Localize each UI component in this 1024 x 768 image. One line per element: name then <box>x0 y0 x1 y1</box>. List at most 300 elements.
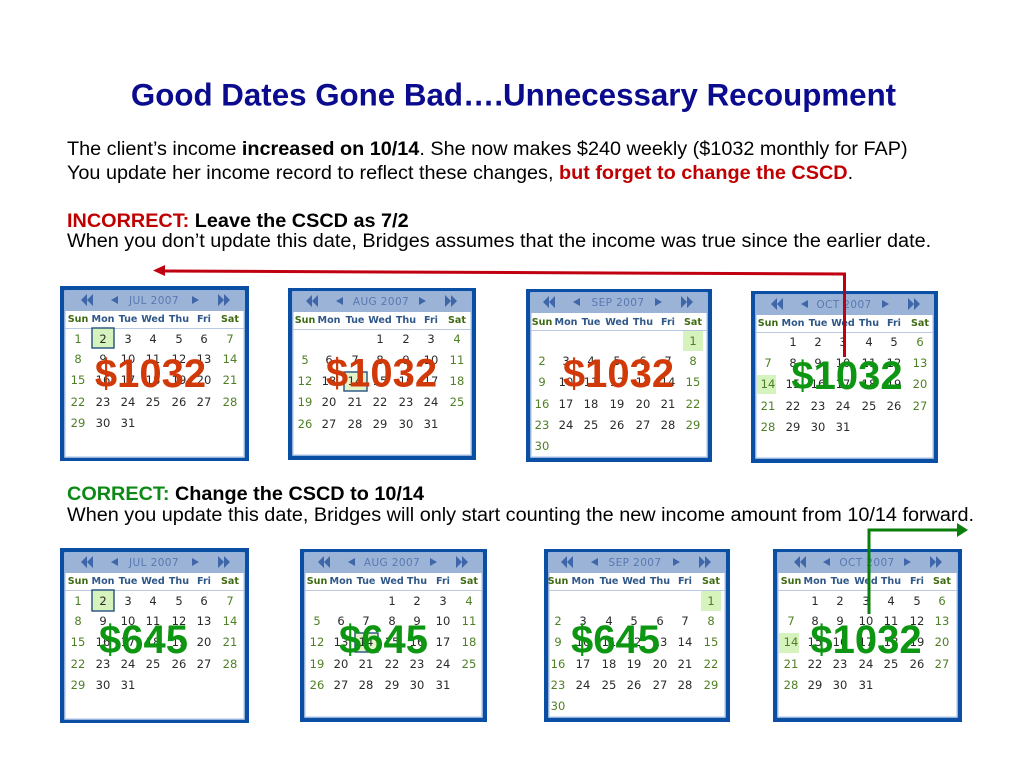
calendar: August 2007 correct: 6 <box>337 614 345 628</box>
calendar: October 2007 incorrect: 12 <box>887 356 901 370</box>
calendar: July 2007 incorrect: Sun <box>68 314 88 325</box>
calendar: September 2007 incorrect: 9 <box>538 375 546 389</box>
calendar: July 2007 incorrect <box>60 286 249 461</box>
calendar: October 2007 correct: 22 <box>808 657 822 671</box>
calendar: September 2007 incorrect: $1032 <box>563 352 674 396</box>
calendar: July 2007 correct: 29 <box>71 678 85 692</box>
calendar: August 2007 incorrect: 30 <box>399 417 413 431</box>
calendar: September 2007 incorrect: 21 <box>661 397 675 411</box>
calendar: September 2007 incorrect: 16 <box>535 397 549 411</box>
calendar: July 2007 incorrect: 20 <box>197 373 211 387</box>
calendar: July 2007 correct: 19 <box>172 635 186 649</box>
calendar: October 2007 correct: Tue <box>831 576 850 587</box>
calendar: July 2007 correct: 17 <box>121 635 135 649</box>
calendar: July 2007 correct: 22 <box>71 657 85 671</box>
calendar: October 2007 correct: 16 <box>833 635 847 649</box>
calendar: July 2007 incorrect: 5 <box>175 332 183 346</box>
calendar: July 2007 correct: 4 <box>149 594 157 608</box>
calendar: August 2007 correct: 30 <box>410 678 424 692</box>
calendar: August 2007 correct: 21 <box>359 657 373 671</box>
calendar: August 2007 incorrect: 18 <box>450 374 464 388</box>
calendar: September 2007 incorrect: 17 <box>559 397 573 411</box>
calendar: September 2007 correct: 29 <box>704 678 718 692</box>
calendar: October 2007 incorrect: 31 <box>836 420 850 434</box>
calendar: September 2007 incorrect: 2 <box>538 354 546 368</box>
calendar: September 2007 incorrect: SEP 2007 <box>592 297 644 309</box>
calendar: September 2007 incorrect: 25 <box>584 418 598 432</box>
calendar: October 2007 incorrect: 16 <box>811 377 825 391</box>
calendar: October 2007 correct: 7 <box>787 614 795 628</box>
calendar: October 2007 incorrect: 1 <box>789 335 797 349</box>
calendar: July 2007 correct: 14 <box>223 614 237 628</box>
calendar: September 2007 correct: 2 <box>554 614 562 628</box>
calendar: October 2007 correct: 8 <box>811 614 819 628</box>
calendar: August 2007 incorrect: 27 <box>322 417 336 431</box>
calendar: August 2007 correct: Thu <box>407 576 427 587</box>
calendar: October 2007 correct: 30 <box>833 678 847 692</box>
calendar: October 2007 correct: 13 <box>935 614 949 628</box>
calendar: August 2007 correct: Fri <box>436 576 450 587</box>
calendar: October 2007 correct: 14 <box>784 635 798 649</box>
calendar: September 2007 incorrect: Mon <box>555 317 578 328</box>
calendar: September 2007 incorrect: 12 <box>610 375 624 389</box>
calendar: August 2007 correct: 14 <box>359 635 373 649</box>
calendar: September 2007 incorrect: 1 <box>689 334 697 348</box>
calendar: July 2007 correct: 16 <box>96 635 110 649</box>
calendar: October 2007 incorrect: 27 <box>913 399 927 413</box>
calendar: August 2007 incorrect: 25 <box>450 395 464 409</box>
calendar: July 2007 incorrect: 30 <box>96 416 110 430</box>
calendar: July 2007 correct: 28 <box>223 657 237 671</box>
calendar: September 2007 incorrect: 3 <box>562 354 570 368</box>
calendar: September 2007 correct: 4 <box>605 614 613 628</box>
calendar: October 2007 incorrect: 15 <box>786 377 800 391</box>
calendar: October 2007 correct: 12 <box>910 614 924 628</box>
calendar: October 2007 correct: 27 <box>935 657 949 671</box>
calendar: September 2007 correct: 5 <box>630 614 638 628</box>
calendar: October 2007 incorrect: 8 <box>789 356 797 370</box>
calendar: July 2007 correct: Wed <box>141 576 165 587</box>
calendar: August 2007 incorrect: 23 <box>399 395 413 409</box>
calendar: September 2007 correct: Wed <box>622 576 646 587</box>
text block: correct: CORRECT: Change the CSCD to 10/14 <box>67 483 424 505</box>
calendar: August 2007 incorrect: Tue <box>346 315 365 326</box>
calendar: July 2007 incorrect: 1 <box>74 332 82 346</box>
calendar: August 2007 correct: Mon <box>330 576 353 587</box>
calendar: July 2007 incorrect: 8 <box>74 352 82 366</box>
calendar: October 2007 correct: 19 <box>910 635 924 649</box>
calendar: July 2007 correct: Fri <box>197 576 211 587</box>
calendar: September 2007 correct: Thu <box>650 576 670 587</box>
calendar: July 2007 correct: 26 <box>172 657 186 671</box>
calendar: July 2007 correct: Mon <box>92 576 115 587</box>
calendar: October 2007 correct: 24 <box>859 657 873 671</box>
calendar: September 2007 correct: 14 <box>678 635 692 649</box>
calendar: July 2007 correct: 9 <box>99 614 107 628</box>
calendar: August 2007 incorrect: 12 <box>298 374 312 388</box>
calendar: September 2007 incorrect: 13 <box>636 375 650 389</box>
calendar: September 2007 incorrect: 20 <box>636 397 650 411</box>
calendar: August 2007 incorrect: 2 <box>402 332 410 346</box>
calendar: July 2007 incorrect: Tue <box>119 314 138 325</box>
calendar: August 2007 incorrect: Fri <box>424 315 438 326</box>
calendar: October 2007 correct: 15 <box>808 635 822 649</box>
calendar: September 2007 incorrect: 24 <box>559 418 573 432</box>
calendar: September 2007 incorrect: 30 <box>535 439 549 453</box>
calendar: October 2007 incorrect: 7 <box>764 356 772 370</box>
calendar: October 2007 correct: 5 <box>913 594 921 608</box>
calendar: August 2007 incorrect: 31 <box>424 417 438 431</box>
calendar: September 2007 incorrect: Sun <box>532 317 552 328</box>
calendar: July 2007 incorrect: $1032 <box>95 352 206 396</box>
calendar: September 2007 incorrect: 8 <box>689 354 697 368</box>
calendar: September 2007 incorrect: 28 <box>661 418 675 432</box>
calendar: October 2007 incorrect: 18 <box>862 377 876 391</box>
calendar: August 2007 incorrect: 11 <box>450 353 464 367</box>
calendar: July 2007 correct: 15 <box>71 635 85 649</box>
calendar: August 2007 correct: 28 <box>359 678 373 692</box>
calendar: September 2007 correct: SEP 2007 <box>609 557 661 569</box>
calendar: October 2007 correct: 2 <box>836 594 844 608</box>
calendar: July 2007 correct: Sun <box>68 576 88 587</box>
calendar: October 2007 correct: Sat <box>933 576 951 587</box>
calendar: September 2007 correct: 21 <box>678 657 692 671</box>
calendar: September 2007 correct: 16 <box>551 657 565 671</box>
calendar: August 2007 incorrect: 24 <box>424 395 438 409</box>
calendar: August 2007 correct: 16 <box>410 635 424 649</box>
calendar: August 2007 incorrect: Mon <box>318 315 341 326</box>
calendar: October 2007 incorrect: 19 <box>887 377 901 391</box>
calendar: August 2007 incorrect: Wed <box>368 315 392 326</box>
calendar: July 2007 correct: 20 <box>197 635 211 649</box>
calendar: July 2007 incorrect: 9 <box>99 352 107 366</box>
calendar: September 2007 correct: 23 <box>551 678 565 692</box>
calendar: August 2007 correct: 24 <box>436 657 450 671</box>
calendar: July 2007 incorrect: 3 <box>124 332 132 346</box>
calendar: August 2007 incorrect: 7 <box>351 353 359 367</box>
calendar: July 2007 correct: 25 <box>146 657 160 671</box>
calendar: September 2007 correct: 22 <box>704 657 718 671</box>
text block: incorrect: INCORRECT: Leave the CSCD as 7/2 <box>67 210 409 232</box>
calendar: July 2007 incorrect: 22 <box>71 395 85 409</box>
calendar: October 2007 incorrect: 17 <box>836 377 850 391</box>
calendar: September 2007 incorrect: Sat <box>684 317 702 328</box>
calendar: September 2007 correct: 20 <box>653 657 667 671</box>
calendar: October 2007 correct: Mon <box>804 576 827 587</box>
calendar: July 2007 incorrect: 7 <box>226 332 234 346</box>
calendar: August 2007 incorrect: 15 <box>373 374 387 388</box>
calendar: October 2007 correct: 21 <box>784 657 798 671</box>
calendar: July 2007 correct: 12 <box>172 614 186 628</box>
calendar: August 2007 correct: 11 <box>462 614 476 628</box>
calendar: September 2007 correct: 7 <box>681 614 689 628</box>
calendar: July 2007 correct <box>60 548 249 723</box>
calendar: July 2007 incorrect: Thu <box>169 314 189 325</box>
calendar: October 2007 incorrect: 22 <box>786 399 800 413</box>
calendar: July 2007 incorrect: 15 <box>71 373 85 387</box>
calendar: September 2007 correct: 24 <box>576 678 590 692</box>
calendar: September 2007 correct: 6 <box>656 614 664 628</box>
calendar: October 2007 incorrect: Tue <box>809 318 828 329</box>
calendar: October 2007 incorrect: 5 <box>890 335 898 349</box>
calendar: October 2007 incorrect: $1032 <box>791 354 903 398</box>
calendar: July 2007 incorrect: 21 <box>223 373 237 387</box>
calendar: October 2007 incorrect: OCT 2007 <box>816 299 872 311</box>
calendar: August 2007 correct: 4 <box>465 594 473 608</box>
calendar: October 2007 incorrect: 10 <box>836 356 850 370</box>
calendar: October 2007 correct: OCT 2007 <box>839 557 895 569</box>
calendar: October 2007 incorrect: Fri <box>887 318 901 329</box>
calendar: September 2007 incorrect: 15 <box>686 375 700 389</box>
calendar: September 2007 correct: 27 <box>653 678 667 692</box>
calendar: July 2007 correct: 24 <box>121 657 135 671</box>
calendar: September 2007 incorrect: 29 <box>686 418 700 432</box>
calendar: August 2007 incorrect: Thu <box>396 315 416 326</box>
calendar: August 2007 incorrect: 8 <box>376 353 384 367</box>
calendar: September 2007 incorrect: 19 <box>610 397 624 411</box>
calendar: September 2007 correct <box>544 549 730 722</box>
calendar: September 2007 incorrect: Thu <box>633 317 653 328</box>
calendar: August 2007 incorrect: 5 <box>301 353 309 367</box>
calendar: August 2007 correct: 12 <box>310 635 324 649</box>
calendar: July 2007 incorrect: 25 <box>146 395 160 409</box>
calendar: August 2007 correct <box>300 549 487 722</box>
calendar: September 2007 correct: 30 <box>551 699 565 713</box>
calendar: July 2007 correct: Thu <box>169 576 189 587</box>
calendar: September 2007 incorrect: 4 <box>587 354 595 368</box>
calendar: October 2007 correct: Sun <box>781 576 801 587</box>
calendar: October 2007 incorrect: 3 <box>839 335 847 349</box>
calendar: September 2007 correct: 10 <box>576 635 590 649</box>
calendar: August 2007 correct: 17 <box>436 635 450 649</box>
calendar: August 2007 correct: 8 <box>388 614 396 628</box>
calendar: July 2007 incorrect: 12 <box>172 352 186 366</box>
calendar: September 2007 incorrect: 5 <box>613 354 621 368</box>
calendar: August 2007 correct: 9 <box>413 614 421 628</box>
calendar: July 2007 incorrect: 29 <box>71 416 85 430</box>
calendar: September 2007 correct: Sat <box>702 576 720 587</box>
calendar: July 2007 correct: 30 <box>96 678 110 692</box>
calendar: October 2007 incorrect: 24 <box>836 399 850 413</box>
calendar: August 2007 correct: AUG 2007 <box>364 557 420 569</box>
calendar: September 2007 incorrect: 18 <box>584 397 598 411</box>
calendar: July 2007 incorrect: Sat <box>221 314 239 325</box>
calendar: July 2007 incorrect: 31 <box>121 416 135 430</box>
calendar: August 2007 incorrect: 14 <box>348 374 362 388</box>
calendar: September 2007 correct: Fri <box>678 576 692 587</box>
calendar: October 2007 incorrect: 29 <box>786 420 800 434</box>
calendar: August 2007 correct: 20 <box>334 657 348 671</box>
calendar: August 2007 incorrect: 17 <box>424 374 438 388</box>
text block: intro: You update her income record to reflect these changes, but forget to change the CSCD. <box>67 162 853 184</box>
calendar: August 2007 correct: Sat <box>460 576 478 587</box>
calendar: August 2007 correct: 3 <box>439 594 447 608</box>
calendar: September 2007 incorrect: Tue <box>582 317 601 328</box>
calendar: October 2007 incorrect: 9 <box>814 356 822 370</box>
calendar: October 2007 correct: Thu <box>881 576 901 587</box>
calendar: September 2007 correct: 19 <box>627 657 641 671</box>
calendar: October 2007 incorrect: Mon <box>782 318 805 329</box>
calendar: October 2007 correct: 1 <box>811 594 819 608</box>
calendar: September 2007 incorrect: 27 <box>636 418 650 432</box>
calendar: August 2007 correct: 5 <box>313 614 321 628</box>
calendar: October 2007 incorrect: 20 <box>913 377 927 391</box>
calendar: September 2007 correct: 1 <box>707 594 715 608</box>
calendar: October 2007 correct: Wed <box>854 576 878 587</box>
calendar: July 2007 correct: 21 <box>223 635 237 649</box>
calendar: October 2007 incorrect <box>751 291 938 463</box>
calendar: July 2007 correct: 2 <box>99 594 107 608</box>
calendar: July 2007 incorrect: 17 <box>121 373 135 387</box>
calendar: August 2007 incorrect: 16 <box>399 374 413 388</box>
calendar: October 2007 correct: 25 <box>884 657 898 671</box>
calendar: July 2007 incorrect: 24 <box>121 395 135 409</box>
calendar: September 2007 incorrect: 14 <box>661 375 675 389</box>
calendar: July 2007 incorrect: 14 <box>223 352 237 366</box>
calendar: September 2007 correct: 26 <box>627 678 641 692</box>
text block: intro <box>67 138 908 184</box>
calendar: August 2007 incorrect: 13 <box>322 374 336 388</box>
calendar: August 2007 incorrect: 29 <box>373 417 387 431</box>
calendar: September 2007 correct: 12 <box>627 635 641 649</box>
calendar: October 2007 incorrect: Wed <box>831 318 855 329</box>
calendar: October 2007 incorrect: Thu <box>859 318 879 329</box>
calendar: September 2007 incorrect: 11 <box>584 375 598 389</box>
text block: correct <box>67 483 974 526</box>
calendar: July 2007 correct: 11 <box>146 614 160 628</box>
calendar: August 2007 incorrect: Sat <box>448 315 466 326</box>
calendar: July 2007 correct: 5 <box>175 594 183 608</box>
calendar: August 2007 correct: 25 <box>462 657 476 671</box>
calendar: August 2007 incorrect: 20 <box>322 395 336 409</box>
calendar: July 2007 incorrect: Wed <box>141 314 165 325</box>
calendar: August 2007 incorrect: 6 <box>325 353 333 367</box>
calendar: September 2007 incorrect: 26 <box>610 418 624 432</box>
calendar: July 2007 correct: 3 <box>124 594 132 608</box>
calendar: October 2007 correct: $1032 <box>810 618 922 662</box>
calendar: September 2007 correct: 18 <box>602 657 616 671</box>
calendar: October 2007 correct: 20 <box>935 635 949 649</box>
calendar: September 2007 incorrect: Wed <box>605 317 629 328</box>
calendar: October 2007 correct <box>773 549 962 722</box>
calendar: September 2007 incorrect: Fri <box>661 317 675 328</box>
calendar: July 2007 incorrect: 23 <box>96 395 110 409</box>
calendar: July 2007 correct: 18 <box>146 635 160 649</box>
text block: incorrect <box>67 210 931 252</box>
calendar: October 2007 incorrect: 13 <box>913 356 927 370</box>
calendar: July 2007 incorrect: 4 <box>149 332 157 346</box>
calendar: August 2007 correct: 26 <box>310 678 324 692</box>
calendar: September 2007 correct: 9 <box>554 635 562 649</box>
calendar: July 2007 correct: 8 <box>74 614 82 628</box>
calendar: October 2007 incorrect: 28 <box>761 420 775 434</box>
calendar: July 2007 incorrect: 28 <box>223 395 237 409</box>
calendar: September 2007 correct: 15 <box>704 635 718 649</box>
calendar: July 2007 correct: 31 <box>121 678 135 692</box>
calendar: August 2007 correct: 2 <box>413 594 421 608</box>
calendar: September 2007 correct: 11 <box>602 635 616 649</box>
calendar: July 2007 correct: 23 <box>96 657 110 671</box>
calendar: October 2007 correct: 17 <box>859 635 873 649</box>
calendar: July 2007 incorrect: 10 <box>121 352 135 366</box>
calendar: October 2007 incorrect: 11 <box>862 356 876 370</box>
calendar: September 2007 correct: Tue <box>600 576 619 587</box>
calendar: July 2007 incorrect: 19 <box>172 373 186 387</box>
calendar: August 2007 incorrect: 9 <box>402 353 410 367</box>
calendar: October 2007 correct: 31 <box>859 678 873 692</box>
calendar: August 2007 correct: 13 <box>334 635 348 649</box>
title: Good Dates Gone Bad….Unnecessary Recoupment <box>131 78 897 112</box>
calendar: October 2007 correct: 6 <box>938 594 946 608</box>
calendar: August 2007 correct: Sun <box>307 576 327 587</box>
calendar: July 2007 incorrect: 18 <box>146 373 160 387</box>
calendar: August 2007 incorrect: 1 <box>376 332 384 346</box>
calendar: August 2007 incorrect: $1032 <box>326 352 437 396</box>
calendar: August 2007 incorrect: 3 <box>427 332 435 346</box>
calendar: August 2007 correct: 23 <box>410 657 424 671</box>
arrow: red, back to earlier date <box>153 265 844 357</box>
calendar: October 2007 incorrect: Sun <box>758 318 778 329</box>
text block: correct: When you update this date, Bridges will only start counting the new income amount from 10/14 forward. <box>67 504 974 526</box>
calendar: October 2007 correct: 18 <box>884 635 898 649</box>
calendar: September 2007 incorrect: 6 <box>639 354 647 368</box>
calendar: August 2007 correct: 7 <box>362 614 370 628</box>
calendar: October 2007 correct: 11 <box>884 614 898 628</box>
calendar: August 2007 incorrect: Sun <box>295 315 315 326</box>
calendar: July 2007 incorrect: JUL 2007 <box>128 295 179 307</box>
calendar: August 2007 incorrect: 19 <box>298 395 312 409</box>
calendar: September 2007 correct: 25 <box>602 678 616 692</box>
calendar: August 2007 correct: 19 <box>310 657 324 671</box>
calendar: October 2007 incorrect: 30 <box>811 420 825 434</box>
arrow: green, forward from 10/14 <box>869 523 968 614</box>
calendar: July 2007 incorrect: 13 <box>197 352 211 366</box>
calendar: October 2007 incorrect: 21 <box>761 399 775 413</box>
calendar: July 2007 incorrect: 2 <box>99 332 107 346</box>
calendar: October 2007 correct: 3 <box>862 594 870 608</box>
text block: incorrect: When you don’t update this date, Bridges assumes that the income was true since the earlier date. <box>67 230 931 252</box>
calendar: August 2007 incorrect: 26 <box>298 417 312 431</box>
calendar: July 2007 correct: Tue <box>119 576 138 587</box>
calendar: October 2007 incorrect: 6 <box>916 335 924 349</box>
calendar: July 2007 incorrect: 11 <box>146 352 160 366</box>
calendar: July 2007 incorrect: Mon <box>92 314 115 325</box>
calendar: July 2007 correct: 13 <box>197 614 211 628</box>
calendar: October 2007 correct: 28 <box>784 678 798 692</box>
calendar: August 2007 correct: 1 <box>388 594 396 608</box>
calendar: September 2007 incorrect: 10 <box>559 375 573 389</box>
calendar: August 2007 incorrect: AUG 2007 <box>353 296 409 308</box>
calendar: August 2007 correct: 10 <box>436 614 450 628</box>
calendar: August 2007 correct: 15 <box>385 635 399 649</box>
calendar: October 2007 incorrect: 26 <box>887 399 901 413</box>
calendar: August 2007 incorrect <box>288 288 476 460</box>
calendar: September 2007 incorrect: 22 <box>686 397 700 411</box>
calendar: August 2007 incorrect: 22 <box>373 395 387 409</box>
calendar: October 2007 incorrect: 2 <box>814 335 822 349</box>
calendar: August 2007 incorrect: 28 <box>348 417 362 431</box>
calendar: September 2007 incorrect: 7 <box>664 354 672 368</box>
calendar: July 2007 correct: 27 <box>197 657 211 671</box>
calendar: August 2007 correct: 31 <box>436 678 450 692</box>
calendar: August 2007 correct: Tue <box>357 576 376 587</box>
calendar: August 2007 incorrect: 21 <box>348 395 362 409</box>
calendar: July 2007 incorrect: Fri <box>197 314 211 325</box>
calendar: September 2007 correct: Mon <box>572 576 595 587</box>
calendar: September 2007 correct: Sun <box>548 576 568 587</box>
calendar: October 2007 correct: 29 <box>808 678 822 692</box>
calendar: October 2007 correct: 9 <box>836 614 844 628</box>
